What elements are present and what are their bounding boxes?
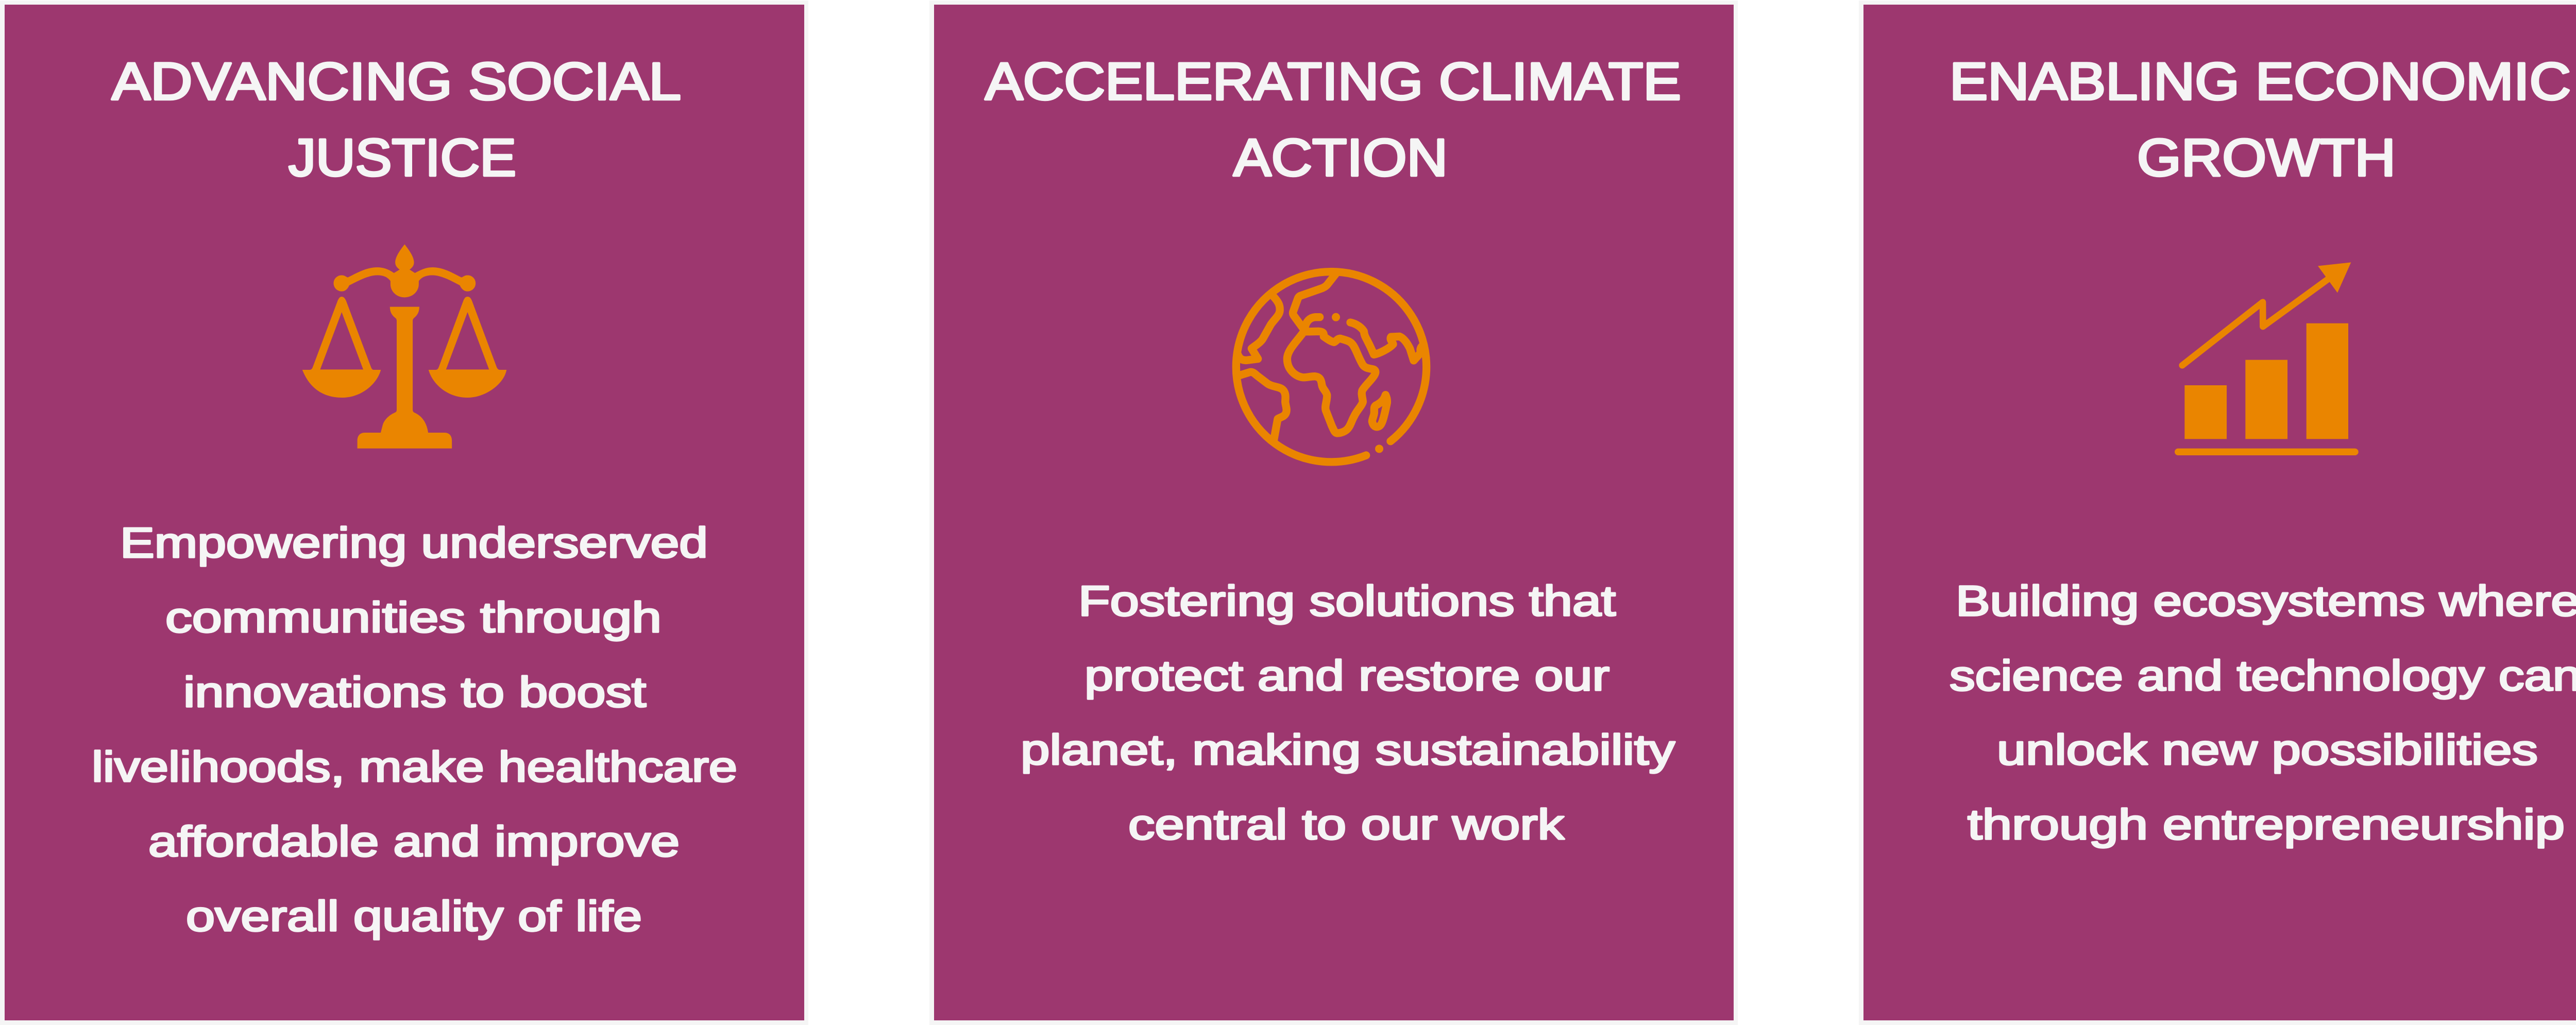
heading: advancing social justice: JUSTICE <box>289 128 516 187</box>
text block: economic growth description: science and technology can <box>1950 652 2576 699</box>
text block: social justice description: affordable and improve <box>148 817 680 865</box>
panel: enabling economic growth <box>1859 1 2576 1025</box>
text block: climate action description: Fostering solutions that <box>1078 577 1616 625</box>
heading: accelerating climate action: ACTION <box>1233 128 1448 187</box>
heading: enabling economic growth <box>1950 52 2571 187</box>
panel: advancing social justice <box>0 1 808 1025</box>
icon: globe <box>1236 272 1427 462</box>
text block: climate action description <box>1021 577 1675 848</box>
text block: social justice description: communities through <box>165 593 662 641</box>
text block: social justice description <box>92 519 737 940</box>
text block: climate action description: planet, making sustainability <box>1021 726 1675 774</box>
text block: social justice description: innovations to boost <box>183 668 646 716</box>
text block: economic growth description: through entrepreneurship <box>1968 800 2565 848</box>
heading: advancing social justice <box>112 52 681 187</box>
icon: rising bar chart with arrow <box>2175 262 2359 455</box>
heading: accelerating climate action <box>985 52 1681 187</box>
text block: social justice description: Empowering underserved <box>120 519 708 567</box>
heading: accelerating climate action: ACCELERATING CLIMATE <box>985 52 1681 111</box>
text block: social justice description: overall quality of life <box>186 892 642 940</box>
icon: scales of justice <box>302 244 506 449</box>
heading: advancing social justice: ADVANCING SOCIAL <box>112 52 681 111</box>
text block: economic growth description: unlock new possibilities <box>1997 726 2538 774</box>
panel: accelerating climate action <box>929 1 1738 1025</box>
text block: economic growth description: Building ecosystems where <box>1956 577 2576 625</box>
text block: economic growth description <box>1950 577 2576 848</box>
text block: climate action description: protect and restore our <box>1084 652 1609 699</box>
heading: enabling economic growth: GROWTH <box>2137 128 2396 187</box>
heading: enabling economic growth: ENABLING ECONOMIC <box>1950 52 2571 111</box>
text block: climate action description: central to our work <box>1128 800 1565 848</box>
text block: social justice description: livelihoods, make healthcare <box>92 743 737 791</box>
